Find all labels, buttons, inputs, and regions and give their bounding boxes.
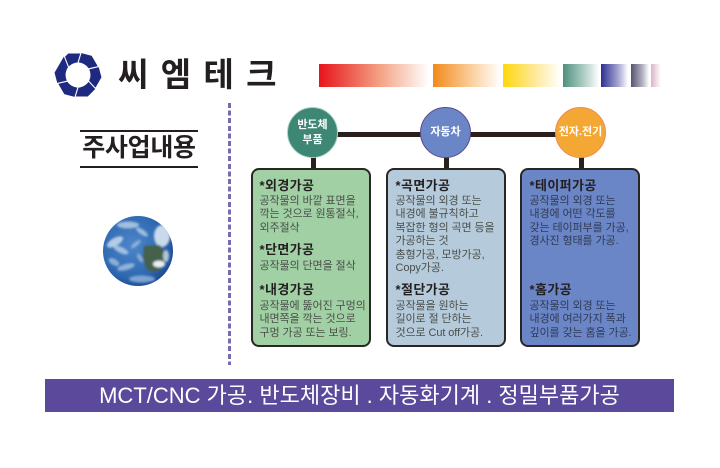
connector: automotive (444, 156, 449, 169)
text: groove processing: 깊이를 갖는 홈을 가공. (530, 327, 632, 339)
connector: semiconductor (311, 156, 316, 169)
text: groove processing: 내경에 여러가지 폭과 (530, 313, 626, 325)
heading: taper processing: *테이퍼가공 (530, 178, 597, 193)
text: curved surface processing: 총형가공, 모방가공, (396, 249, 485, 261)
circle: automotive (420, 107, 471, 158)
text: taper processing: 경사진 형태를 가공. (530, 235, 619, 247)
circle: semiconductor parts (287, 107, 338, 158)
circle: semiconductor parts: 부품 (302, 134, 323, 146)
text: inner processing (260, 300, 366, 339)
heading: end face processing: *단면가공 (260, 242, 314, 257)
text: groove processing (530, 300, 632, 339)
circle: electrical and electronics: 전자.전기 (559, 126, 602, 138)
heading: curved surface processing: *곡면가공 (396, 178, 450, 193)
heading: inner processing: *내경가공 (260, 282, 314, 297)
text: cutting: 공작물을 원하는 (396, 300, 469, 312)
earth globe (103, 216, 173, 286)
panel: semiconductor processes (251, 168, 371, 347)
text: curved surface processing: 가공하는 것 (396, 235, 449, 247)
footer banner (45, 379, 674, 412)
text: cutting (396, 300, 483, 339)
gradient colour strip (319, 64, 660, 87)
panel: automotive processes (386, 168, 506, 347)
text: cutting: 것으로 Cut off가공. (396, 327, 483, 339)
text: outer processing (260, 194, 359, 234)
panel: electronics processes (520, 168, 640, 347)
text: curved surface processing: 내경에 불규칙하고 (396, 208, 479, 220)
text: taper processing: 공작물의 외경 또는 (530, 195, 616, 207)
text: taper processing: 갖는 테이퍼부를 가공, (530, 222, 629, 234)
circle: automotive: 자동차 (430, 126, 461, 138)
heading: main business: 주사업내용 (82, 134, 196, 162)
circle: electrical and electronics (555, 107, 606, 158)
text: curved surface processing: 복잡한 형의 곡면 등을 (396, 222, 495, 234)
text: groove processing: 공작물의 외경 또는 (530, 300, 616, 312)
heading: groove processing: *홈가공 (530, 282, 572, 297)
footer banner: MCT/CNC 가공. 반도체장비 . 자동화기계 . 정밀부품가공 (99, 383, 620, 408)
horizontal connector line (313, 132, 581, 137)
icon: company logo (54, 53, 102, 97)
text: cutting: 길이로 절 단하는 (396, 313, 472, 325)
text: curved surface processing: 공작물의 외경 또는 (396, 195, 482, 207)
text: taper processing (530, 194, 629, 247)
text: curved surface processing (396, 194, 495, 274)
heading: cutting: *절단가공 (396, 282, 450, 297)
connector: electronics (579, 156, 584, 169)
text: outer processing: 공작물의 바깥 표면을 (260, 195, 356, 207)
text: end face processing: 공작물의 단면을 절삭 (260, 260, 356, 272)
text: inner processing: 내면쪽을 깍는 것으로 (260, 313, 356, 325)
text: outer processing: 깍는 것으로 원통절삭, (260, 208, 359, 220)
dashed vertical divider (228, 103, 231, 365)
heading: outer processing: *외경가공 (260, 178, 314, 193)
text: inner processing: 구멍 가공 또는 보링. (260, 327, 351, 339)
text: curved surface processing: Copy가공. (396, 262, 444, 274)
text: taper processing: 내경에 어떤 각도를 (530, 208, 616, 220)
company name: 씨 엠 테 크 (118, 56, 278, 93)
circle: semiconductor parts: 반도체 (297, 118, 328, 130)
text: inner processing: 공작물에 뚫어진 구멍의 (260, 300, 366, 312)
text: outer processing: 외주절삭 (260, 222, 300, 234)
